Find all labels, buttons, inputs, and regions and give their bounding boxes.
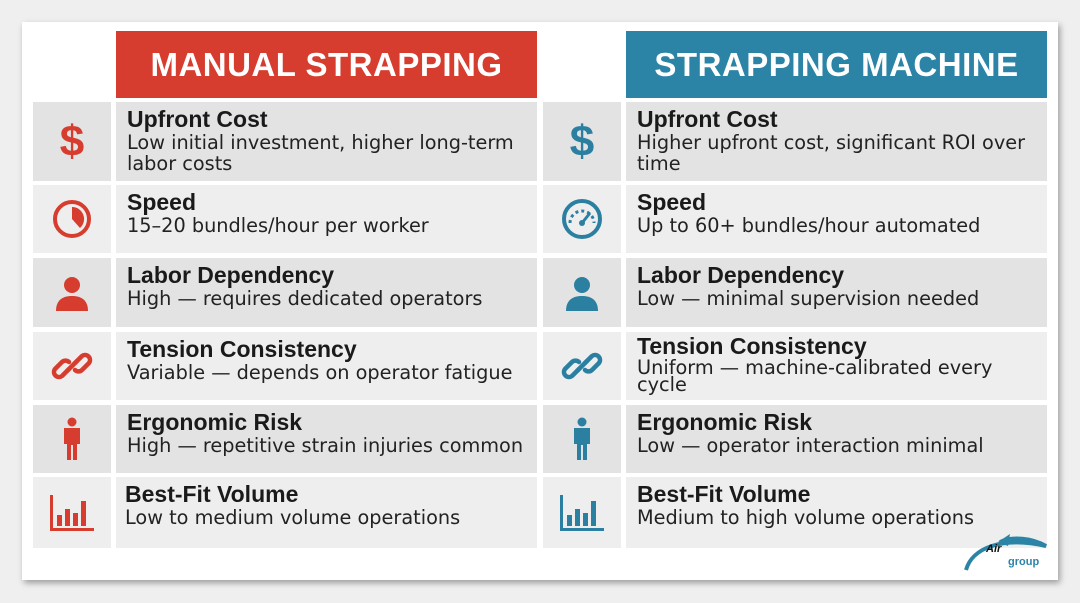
text: upfront cost manual [116, 102, 537, 181]
text: ergonomic machine: Ergonomic Risk [637, 409, 812, 435]
icon: person blue [543, 258, 621, 327]
row: volume right [543, 477, 1047, 548]
text: upfront cost machine [626, 102, 1047, 181]
row: ergonomic right [543, 405, 1047, 473]
header: strapping machine: STRAPPING MACHINE [654, 46, 1019, 82]
text: upfront cost machine: Upfront Cost [637, 106, 778, 132]
row: labor right [543, 258, 1047, 327]
text: ergonomic manual: Ergonomic Risk [127, 409, 302, 435]
text: speed machine: Speed [637, 189, 706, 215]
row: upfront cost left [33, 102, 537, 181]
text: tension manual: Tension Consistency [127, 336, 357, 362]
icon: standing figure red [33, 405, 111, 473]
text: volume machine [626, 477, 1047, 548]
row: volume left [33, 477, 537, 548]
icon: dollar blue: $ [570, 116, 594, 166]
icon: dollar blue [543, 102, 621, 181]
header: manual strapping: MANUAL STRAPPING [150, 46, 503, 82]
text: speed machine [626, 185, 1047, 253]
text: speed manual [116, 185, 537, 253]
text: labor machine: Low — minimal supervision needed [637, 287, 979, 310]
icon: person red [33, 258, 111, 327]
text: speed manual: 15–20 bundles/hour per worker [127, 214, 429, 237]
text: ergonomic machine: Low — operator interaction minimal [637, 434, 984, 457]
text: tension machine: Uniform — machine-calibrated every cycle [637, 356, 992, 396]
text: volume manual [116, 477, 537, 548]
text: labor manual: High — requires dedicated operators [127, 287, 482, 310]
icon: chain red [33, 332, 111, 400]
text: upfront cost manual: Low initial investment, higher long-term labor costs [127, 131, 514, 175]
icon: clock [33, 185, 111, 253]
row: ergonomic left [33, 405, 537, 473]
text: ergonomic manual: High — repetitive strain injuries common [127, 434, 523, 457]
text: labor machine: Labor Dependency [637, 262, 844, 288]
text: upfront cost manual: Upfront Cost [127, 106, 268, 132]
row: upfront cost right [543, 102, 1047, 181]
row: tension left [33, 332, 537, 400]
text: labor manual [116, 258, 537, 327]
icon: dollar red: $ [60, 116, 84, 166]
text: speed machine: Up to 60+ bundles/hour automated [637, 214, 980, 237]
text: tension manual [116, 332, 537, 400]
icon: chain blue [543, 332, 621, 400]
logo: group [964, 534, 1047, 570]
text: tension machine: Tension Consistency [637, 333, 867, 359]
row: tension right [543, 332, 1047, 400]
row: labor left [33, 258, 537, 327]
text: volume machine: Medium to high volume operations [637, 506, 974, 529]
icon: standing figure blue [543, 405, 621, 473]
text: labor machine [626, 258, 1047, 327]
logo: group: group [1008, 556, 1039, 568]
row: speed right [543, 185, 1047, 253]
icon: bar chart red [33, 477, 111, 548]
header: strapping machine [626, 31, 1047, 98]
row: speed left [33, 185, 537, 253]
text: ergonomic machine [626, 405, 1047, 473]
icon: bar chart blue [543, 477, 621, 548]
text: tension machine [626, 332, 1047, 400]
text: tension manual: Variable — depends on operator fatigue [127, 361, 512, 384]
icon: gauge [543, 185, 621, 253]
text: labor manual: Labor Dependency [127, 262, 334, 288]
text: upfront cost machine: Higher upfront cost, significant ROI over time [637, 131, 1025, 175]
header: manual strapping [116, 31, 537, 98]
text: speed manual: Speed [127, 189, 196, 215]
text: volume manual: Low to medium volume operations [125, 506, 460, 529]
text: volume machine: Best-Fit Volume [637, 481, 810, 507]
text: ergonomic manual [116, 405, 537, 473]
icon: dollar red [33, 102, 111, 181]
text: volume manual: Best-Fit Volume [125, 481, 298, 507]
logo: group: Air [985, 543, 1002, 555]
